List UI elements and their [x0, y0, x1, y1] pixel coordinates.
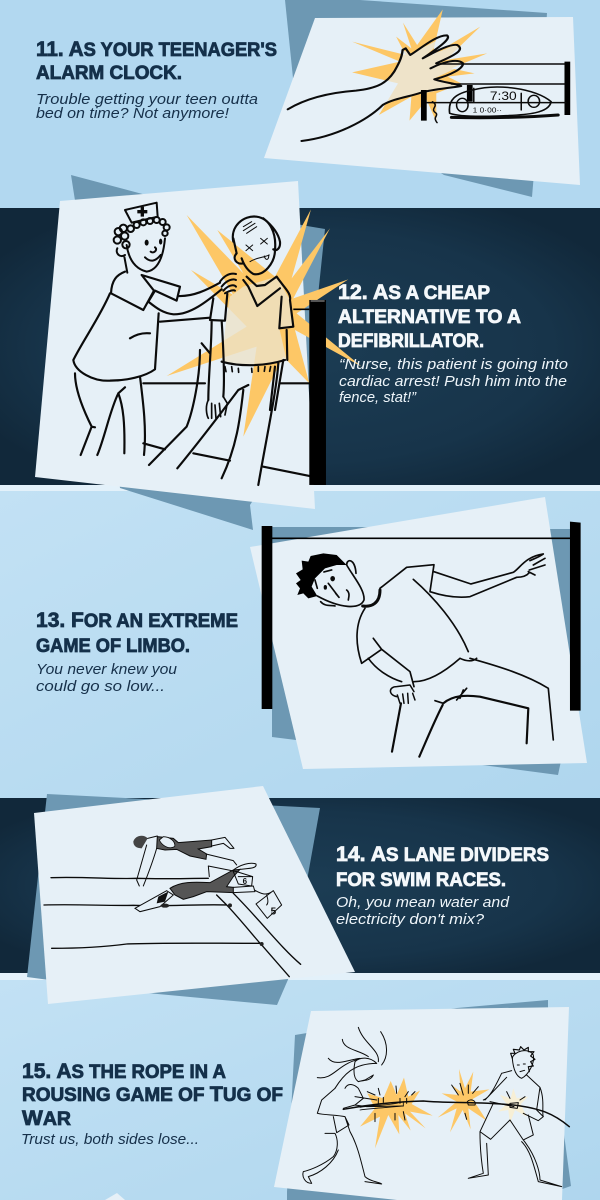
panel: section 13 limbo — [250, 497, 587, 775]
paper sheet — [34, 786, 355, 1004]
heading: item 14: FOR SWIM RACES. — [336, 870, 506, 891]
heading: item 12: DEFIBRILLATOR. — [338, 331, 484, 352]
icon: spark burst — [352, 9, 487, 122]
patient — [149, 217, 293, 485]
next sheet corner — [105, 1193, 125, 1200]
icon: spark burst — [167, 209, 362, 437]
starting blocks — [208, 866, 282, 918]
heading: item 15: WAR — [22, 1106, 71, 1130]
heading: item 13: GAME OF LIMBO. — [36, 636, 190, 657]
paper sheet — [250, 497, 587, 769]
dark band: section 12 — [0, 208, 600, 491]
text block: item 11 — [36, 92, 258, 122]
panel: section 15 tug of war — [274, 1000, 571, 1200]
illustration: tug of war — [303, 1027, 569, 1187]
paper sheet — [35, 181, 315, 509]
heading: item 11: 11. AS YOUR TEENAGER'S — [36, 37, 277, 61]
text block: item 13 — [36, 662, 177, 695]
heading: item 13: 13. FOR AN EXTREME — [36, 608, 238, 632]
paper sheet — [264, 17, 580, 185]
heading: item 12: 12. AS A CHEAP — [338, 280, 490, 304]
heading: item 15 — [22, 1059, 283, 1130]
heading: item 13 — [36, 608, 238, 657]
heading: item 14: 14. AS LANE DIVIDERS — [336, 842, 549, 866]
heading: item 14 — [336, 842, 549, 891]
illustration: man limbo — [262, 522, 581, 757]
icon: faint spark — [498, 1088, 528, 1123]
rope — [343, 1101, 569, 1127]
text block: item 14 — [336, 895, 510, 928]
text block: item 15: Trust us, both sides lose... — [21, 1132, 199, 1148]
panel: section 11 alarm clock — [264, 0, 580, 197]
text block: item 12: “Nurse, this patient is going into — [339, 357, 568, 373]
ticks — [367, 1083, 525, 1122]
woman hair — [317, 1027, 387, 1088]
illustration: nurse and patient — [73, 203, 362, 485]
heading: item 12 — [338, 280, 521, 352]
text block: item 13: You never knew you — [36, 662, 177, 678]
dark band: section 14 — [0, 798, 600, 980]
nurse — [73, 272, 309, 476]
heading: item 15: 15. AS THE ROPE IN A — [22, 1059, 226, 1083]
text block: item 11: Trouble getting your teen outta — [36, 92, 258, 108]
woman body — [303, 1058, 403, 1184]
heading: item 12: ALTERNATIVE TO A — [338, 307, 521, 328]
illustration: hand and clock — [288, 9, 570, 141]
illustration: hand and clock: 1 0·00·· — [473, 106, 502, 115]
text block: item 11: bed on time? Not anymore! — [36, 106, 229, 122]
illustration: swimmers — [44, 836, 301, 977]
shadow sheet — [285, 0, 547, 197]
fence post — [309, 300, 326, 485]
text block: item 12 — [339, 357, 568, 406]
lower swimmer — [170, 869, 240, 899]
text block: item 12: cardiac arrest! Push him into the — [339, 374, 567, 390]
illustration: swimmers: 5 — [271, 907, 277, 918]
text block: item 13: could go so low... — [36, 679, 165, 695]
man — [468, 1051, 562, 1187]
upper swimmer — [133, 836, 148, 848]
paper sheet — [274, 1007, 569, 1200]
lighter sky section 15 — [0, 980, 600, 1200]
panel: section 14 swim lanes — [27, 786, 355, 1005]
shadow sheet — [71, 175, 325, 530]
nurse head — [125, 203, 158, 223]
heading line 2: item 11: ALARM CLOCK. — [36, 63, 182, 84]
text block: item 14: electricity don't mix? — [336, 912, 485, 928]
icon: right spark — [438, 1069, 489, 1132]
illustration: swimmers: 6 — [243, 877, 248, 886]
shadow sheet — [27, 794, 320, 1005]
panel: section 12 defibrillator — [35, 175, 362, 530]
shadow sheet — [287, 1000, 571, 1200]
text block: item 14: Oh, you mean water and — [336, 895, 510, 911]
text block: item 12: fence, stat!” — [339, 390, 417, 406]
lighter sky section 13 — [0, 491, 600, 798]
illustration: hand and clock: 7:30 — [490, 89, 517, 103]
shadow sheet — [272, 527, 574, 775]
heading: item 15: ROUSING GAME OF TUG OF — [22, 1082, 283, 1106]
icon: left spark — [360, 1078, 433, 1148]
